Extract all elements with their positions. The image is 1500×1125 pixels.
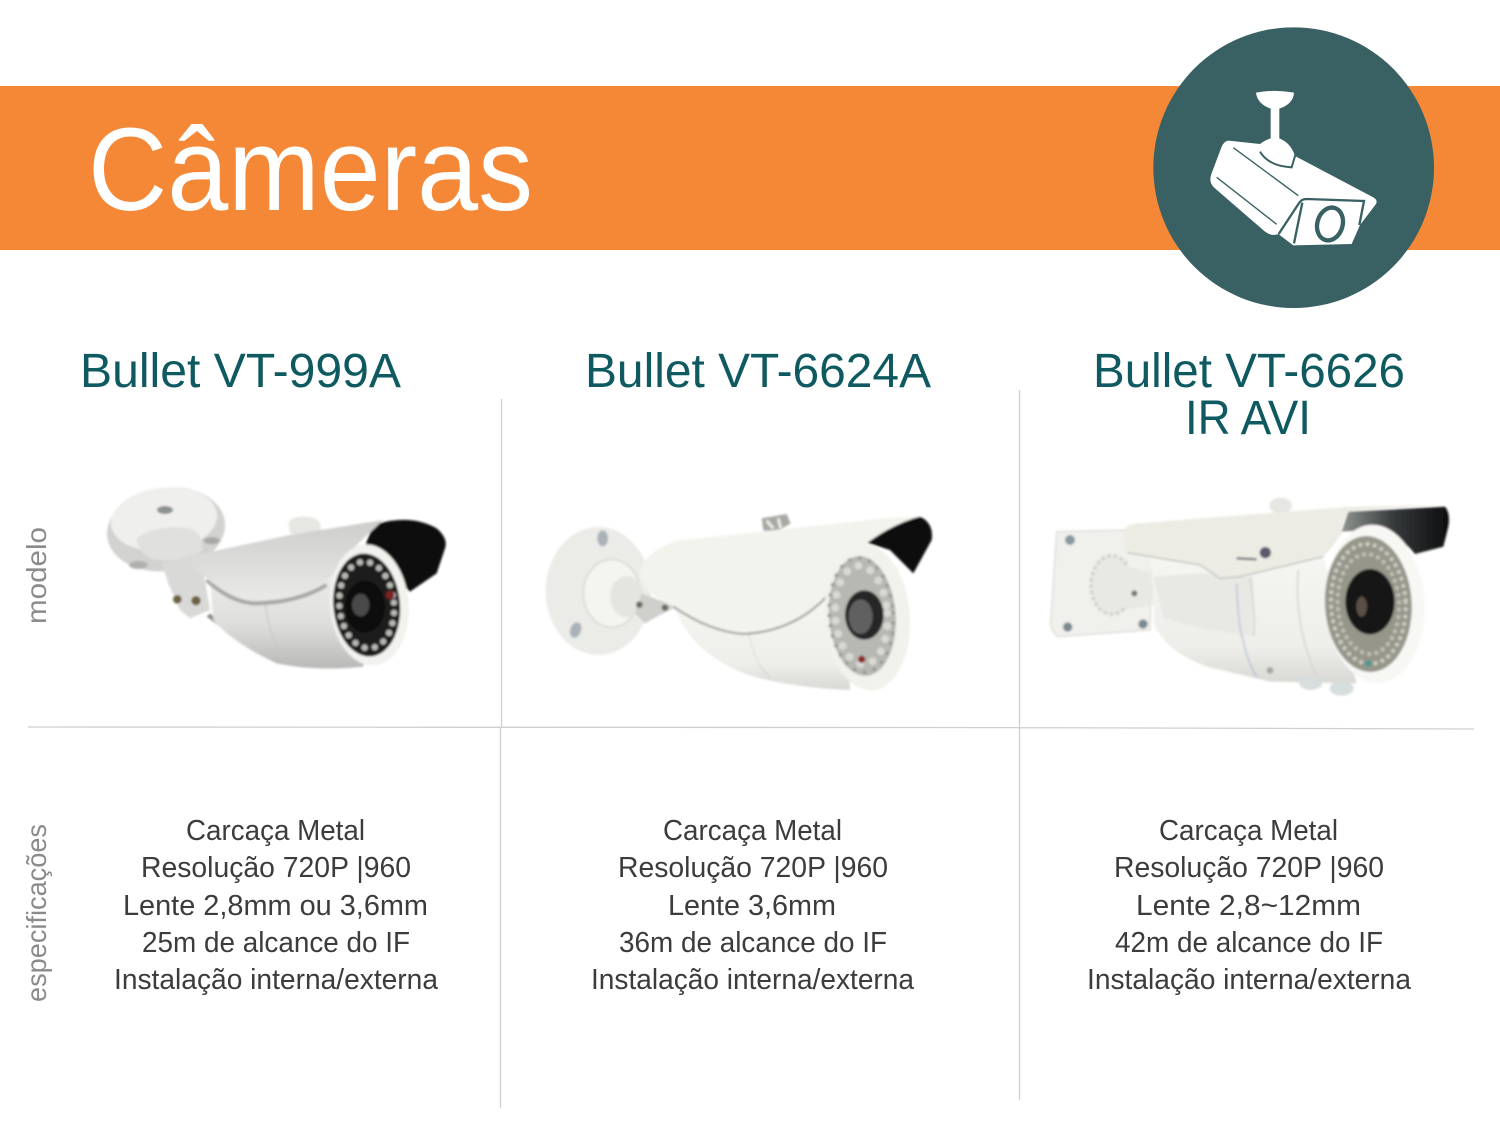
top screw — [288, 517, 321, 535]
arm — [162, 553, 210, 618]
mount disc — [546, 527, 651, 655]
specifications: VT-999A: 25m de alcance do IF — [142, 927, 410, 959]
specifications: VT-6626 IR AVI: 42m de alcance do IF — [1115, 927, 1383, 959]
body — [1150, 557, 1357, 683]
model name: Bullet VT-6626 IR AVI: IR AVI — [1185, 392, 1311, 445]
specifications: VT-999A: Resolução 720P |960 — [141, 852, 411, 884]
specifications: VT-999A: Instalação interna/externa — [114, 964, 438, 996]
model name: Bullet VT-6626 IR AVI — [1093, 345, 1405, 445]
visor — [1342, 507, 1449, 554]
wall bracket — [1051, 530, 1153, 637]
front ring — [820, 541, 915, 693]
specifications: VT-6626 IR AVI: Resolução 720P |960 — [1114, 852, 1384, 884]
specifications: VT-6624A: Instalação interna/externa — [591, 964, 914, 996]
body — [673, 600, 850, 690]
body — [210, 570, 377, 669]
hood — [1123, 505, 1445, 578]
photo: camera VT-999A — [101, 480, 446, 669]
front ring — [325, 541, 414, 669]
mount disc — [101, 480, 231, 579]
visor — [363, 520, 446, 592]
row label: modelo: modelo — [21, 527, 52, 624]
top screw — [762, 514, 791, 532]
specifications: VT-6624A: Carcaça Metal — [663, 815, 842, 847]
specifications: VT-6624A: 36m de alcance do IF — [619, 927, 887, 959]
specifications: VT-6626 IR AVI — [1087, 815, 1411, 996]
specifications: VT-999A: Lente 2,8mm ou 3,6mm — [123, 890, 428, 922]
specifications: VT-6626 IR AVI: Lente 2,8~12mm — [1136, 890, 1361, 922]
specifications: VT-6624A: Resolução 720P |960 — [618, 852, 888, 884]
cable glands — [1299, 677, 1322, 690]
row label: especificações: especificações — [21, 824, 52, 1002]
specifications: VT-6624A — [591, 815, 914, 996]
specifications: VT-999A — [114, 815, 438, 996]
visor — [863, 517, 932, 573]
specifications: VT-6626 IR AVI: Carcaça Metal — [1159, 815, 1338, 847]
title: Câmeras — [88, 104, 533, 236]
hood — [640, 516, 922, 634]
front ring — [1322, 522, 1428, 686]
specifications: VT-999A: Carcaça Metal — [186, 815, 365, 847]
orange header band — [0, 86, 1500, 250]
model name: Bullet VT-999A: Bullet VT-999A — [80, 345, 401, 398]
hood — [191, 520, 383, 600]
photo: camera VT-6624A — [546, 514, 932, 693]
hood shadow — [207, 580, 327, 603]
icon: security camera badge — [1153, 27, 1434, 308]
specifications: VT-6624A: Lente 3,6mm — [668, 890, 836, 922]
arm — [635, 593, 677, 623]
specifications: VT-6626 IR AVI: Instalação interna/externa — [1087, 964, 1411, 996]
model name: Bullet VT-6624A: Bullet VT-6624A — [585, 345, 931, 398]
top knob — [1269, 498, 1292, 514]
photo: camera VT-6626 IR AVI — [1051, 498, 1449, 696]
model name: Bullet VT-6626 IR AVI: Bullet VT-6626 — [1093, 345, 1405, 398]
